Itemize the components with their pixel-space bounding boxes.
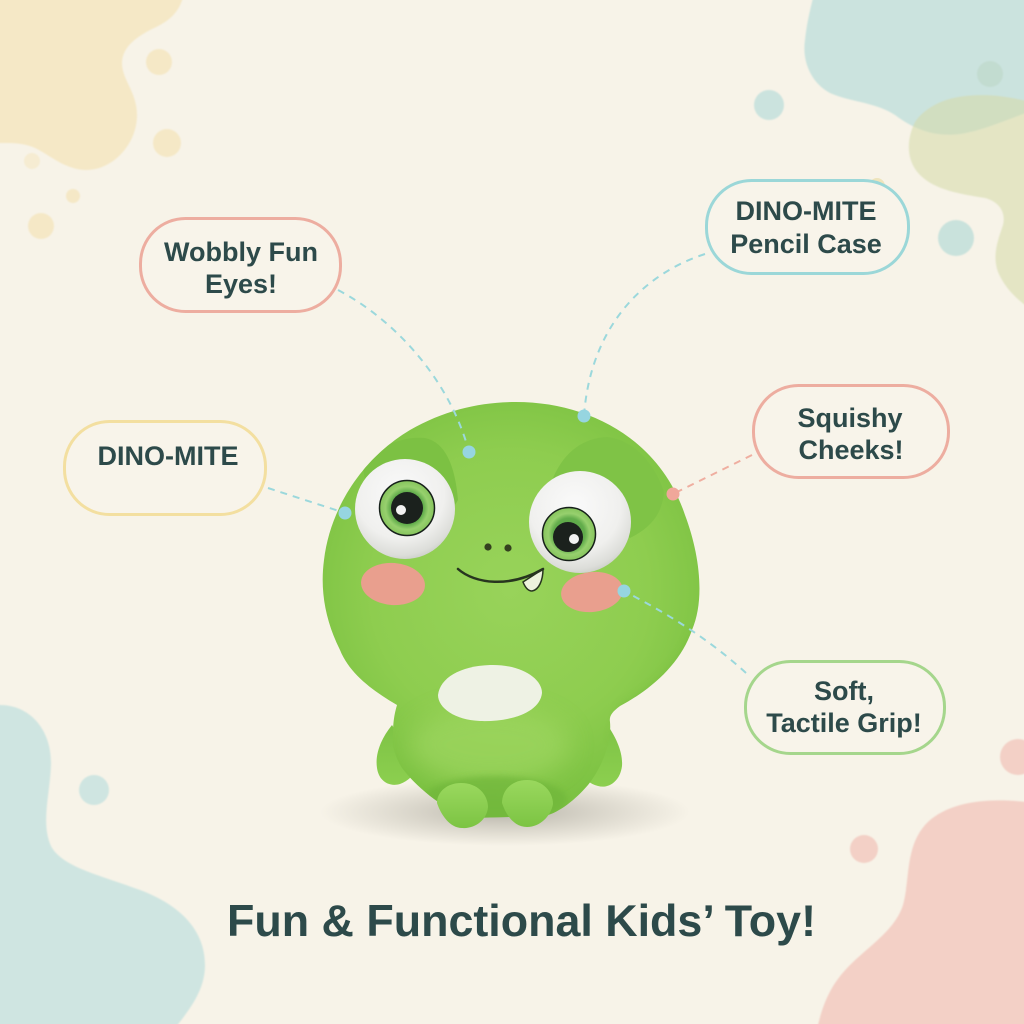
callout: squishy cheeks: Squishy — [797, 403, 903, 433]
right eye — [529, 471, 631, 573]
head edge shading — [620, 638, 689, 706]
left foot — [437, 783, 488, 828]
callout: squishy cheeks: Cheeks! — [798, 435, 904, 465]
left eye socket — [363, 438, 458, 505]
toy shadow — [320, 778, 690, 846]
left eye — [355, 459, 455, 559]
belly patch — [438, 665, 542, 721]
callout: soft tactile grip: Tactile Grip! — [766, 708, 922, 738]
green toy — [310, 395, 710, 828]
callout: dino-mite pencil case — [706, 180, 908, 274]
right cheek — [559, 569, 625, 615]
mouth — [458, 569, 543, 582]
right eye socket — [553, 437, 664, 538]
right foot — [502, 780, 553, 827]
blob: bottom right pink — [816, 739, 1024, 1024]
body highlight — [412, 716, 566, 778]
blob: top left yellow — [0, 0, 185, 239]
connector: pencil case — [578, 254, 705, 422]
callout: squishy cheeks — [754, 386, 948, 478]
callout: dino-mite pencil case: Pencil Case — [730, 229, 882, 259]
connector: squishy cheeks — [666, 455, 752, 500]
blob: small yellow behind pencil case callout — [869, 178, 885, 194]
blob: bottom left teal — [0, 705, 205, 1024]
nostrils — [484, 543, 512, 552]
callout: wobbly fun eyes: Eyes! — [205, 269, 277, 299]
callout: dino-mite — [64, 422, 266, 514]
callout: wobbly fun eyes: Wobbly Fun — [164, 237, 318, 267]
right arm — [580, 723, 622, 787]
connector: dino-mite — [268, 488, 352, 520]
blob: top right teal and green — [754, 0, 1024, 312]
body and head — [310, 395, 710, 825]
callout: wobbly fun eyes — [140, 218, 340, 312]
callout: dino-mite pencil case: DINO-MITE — [736, 196, 876, 226]
connector: wobbly eyes — [338, 290, 476, 458]
callout: dino-mite: DINO-MITE — [98, 441, 238, 471]
foot contact shading — [426, 774, 566, 818]
left cheek — [360, 561, 426, 607]
connector: tactile grip — [618, 584, 746, 673]
callout: soft tactile grip — [746, 662, 944, 754]
tooth — [523, 569, 543, 591]
callout: soft tactile grip: Soft, — [814, 676, 874, 706]
left arm — [377, 725, 418, 785]
title: Fun & Functional Kids’ Toy! — [227, 896, 816, 946]
